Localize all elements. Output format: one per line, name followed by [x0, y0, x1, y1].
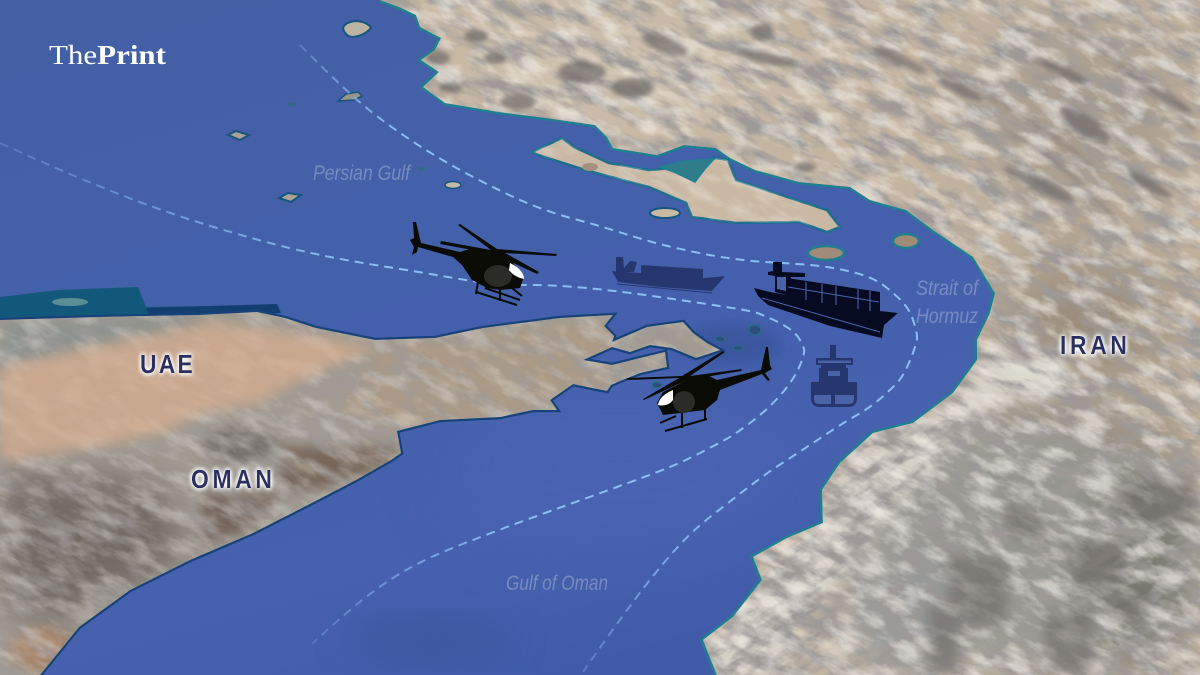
UAE desert	[0, 322, 378, 462]
land: Iran coast	[379, 0, 1200, 675]
shipping route: northern lane	[300, 45, 917, 672]
islands	[228, 21, 919, 260]
label: OMAN: OMAN	[191, 466, 272, 494]
icon: background cargo ship	[612, 257, 725, 293]
land: UAE and Oman	[0, 287, 726, 675]
label: Persian Gulf: Persian Gulf	[313, 162, 412, 185]
label: Strait of Hormuz: Strait of	[916, 277, 980, 300]
shipping route: southern lane	[0, 143, 804, 644]
land: Qeshm island	[530, 136, 842, 234]
label: IRAN: IRAN	[1060, 332, 1127, 360]
logo: ThePrint: ThePrint	[49, 40, 166, 70]
label: Strait of Hormuz: Hormuz	[916, 305, 978, 328]
icon: helicopter top left	[410, 222, 557, 305]
label: UAE: UAE	[140, 351, 193, 379]
label: Gulf of Oman: Gulf of Oman	[506, 572, 608, 595]
icon: helicopter bottom right	[627, 347, 772, 431]
reef islets near Musandam	[652, 325, 761, 388]
icon: large container ship	[754, 262, 898, 338]
icon: head-on ship	[811, 345, 857, 407]
